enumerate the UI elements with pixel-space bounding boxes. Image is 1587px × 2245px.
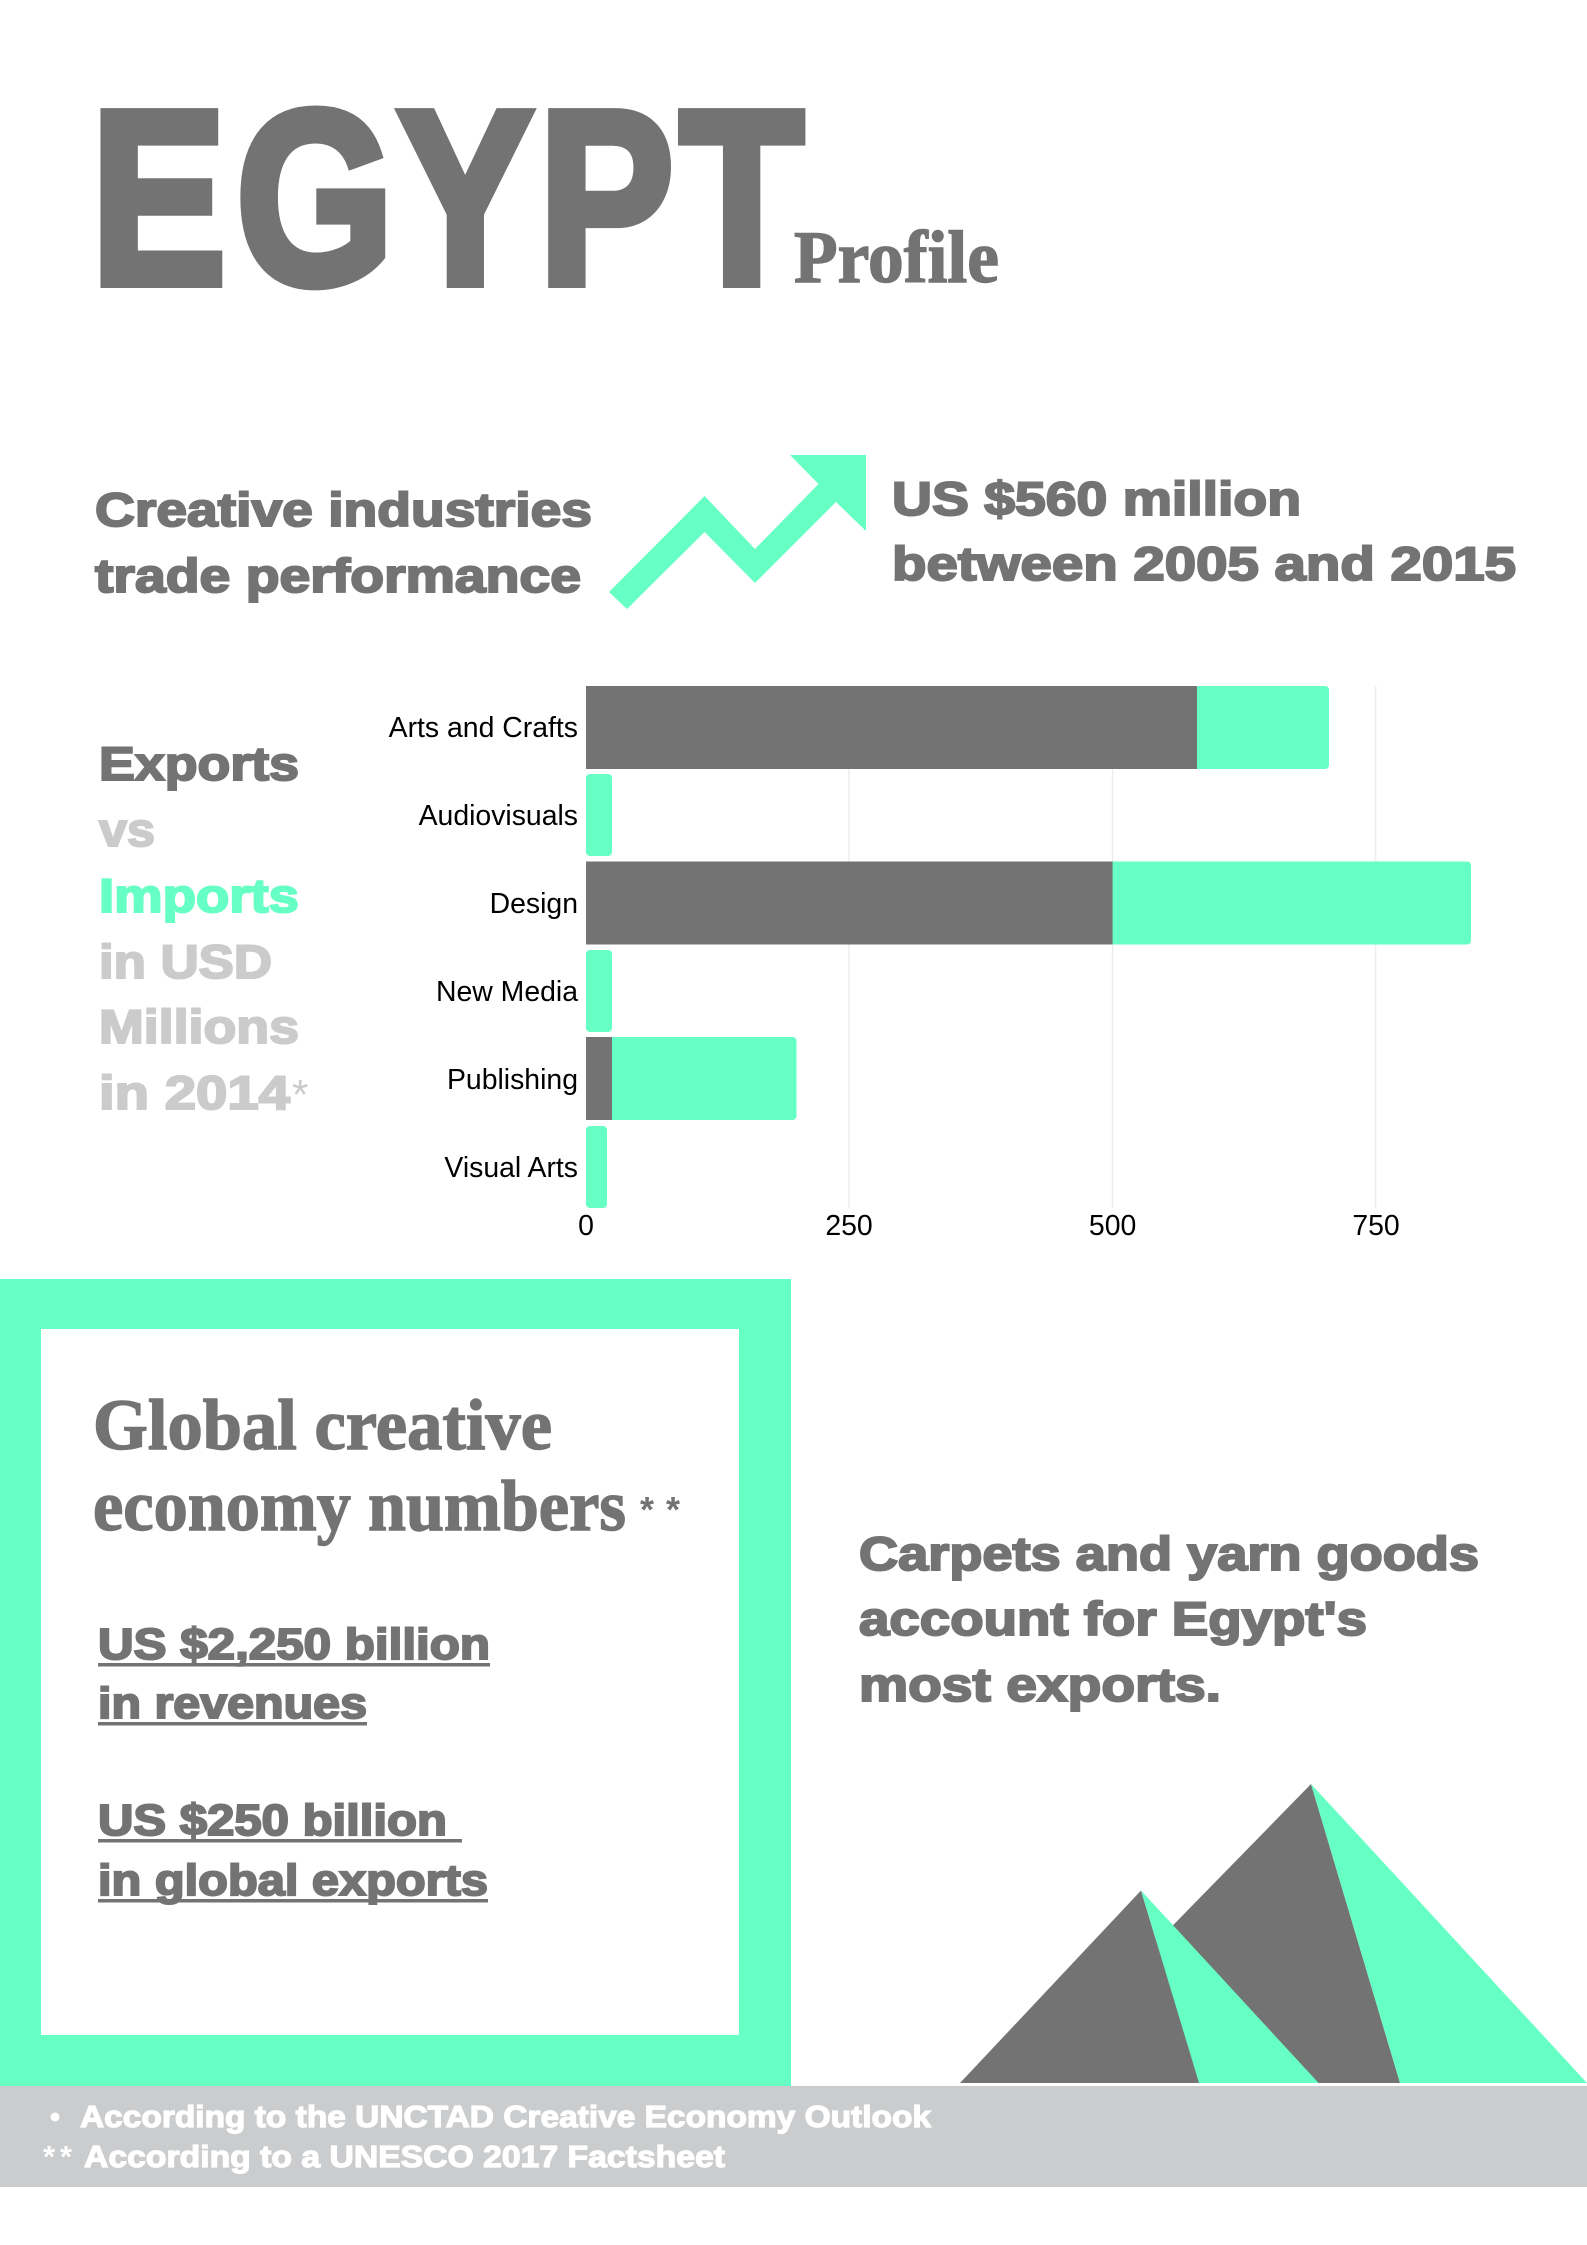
chart legend: exports vs imports: vs [99,803,155,856]
chart legend: exports vs imports: Imports [99,869,299,922]
callout: US $560 million [892,472,1516,590]
category labels [389,712,578,1184]
panel heading: economy numbers [93,1466,626,1546]
callout: US $560 million: US $560 million [892,472,1301,525]
value axis labels: 750 [1352,1210,1400,1242]
bar: visual arts [586,1126,607,1208]
category labels: Arts and Crafts [389,712,578,744]
bar: arts and crafts [586,686,1329,769]
title word: Egypt: EGYPT [91,60,803,335]
panel heading [93,1385,680,1546]
icon: rising trend arrow [609,455,866,609]
bar: new media [586,950,612,1032]
bar: design [586,862,1471,944]
panel heading: ** [640,1489,680,1530]
category labels: New Media [436,976,578,1008]
text block: carpets and yarn goods: Carpets and yarn goods [859,1527,1479,1580]
source note 1: According to the UNCTAD Creative Economy Outlook [80,2099,932,2134]
chart legend: exports vs imports: Millions [99,1000,299,1053]
stat: revenues: in revenues [98,1679,367,1728]
stat: global exports [98,1796,488,1905]
category labels: Visual Arts [444,1152,578,1184]
chart legend: exports vs imports [99,737,308,1119]
stat: global exports: in global exports [98,1856,488,1905]
chart legend: exports vs imports: * [292,1071,308,1118]
footer: sources [0,2086,1587,2187]
heading: creative industries trade performance [95,483,592,602]
bar: audiovisuals [586,774,612,856]
bar: publishing [586,1037,796,1120]
text block: carpets and yarn goods: most exports. [859,1658,1221,1711]
source note 2: ** [43,2139,73,2174]
category labels: Publishing [447,1064,578,1096]
source note 2: According to a UNESCO 2017 Factsheet [84,2139,725,2174]
callout: US $560 million: between 2005 and 2015 [892,537,1516,590]
heading: creative industries trade performance: trade performance [95,549,581,602]
value axis labels [578,1210,1400,1242]
category labels: Design [490,888,578,920]
category labels: Audiovisuals [419,800,578,832]
heading: creative industries trade performance: Creative industries [95,483,592,536]
bar chart [389,686,1471,1242]
stat: revenues: US $2,250 billion [98,1620,490,1669]
chart legend: exports vs imports: in USD [99,935,272,988]
text block: carpets and yarn goods [859,1527,1479,1711]
value axis labels: 250 [825,1210,873,1242]
value axis labels: 0 [578,1210,594,1242]
title [91,60,999,335]
chart legend: exports vs imports: Exports [99,737,299,790]
value axis labels: 500 [1089,1210,1136,1242]
stat: global exports: US $250 billion [98,1796,447,1845]
panel heading: Global creative [93,1385,552,1465]
text block: carpets and yarn goods: account for Egypt's [859,1592,1367,1645]
panel: global creative economy numbers [0,1279,791,2086]
chart legend: exports vs imports: in 2014 [99,1066,290,1119]
stat: revenues [98,1620,490,1728]
icon: pyramids [960,1784,1587,2083]
subtitle: Profile: Profile [794,217,999,299]
